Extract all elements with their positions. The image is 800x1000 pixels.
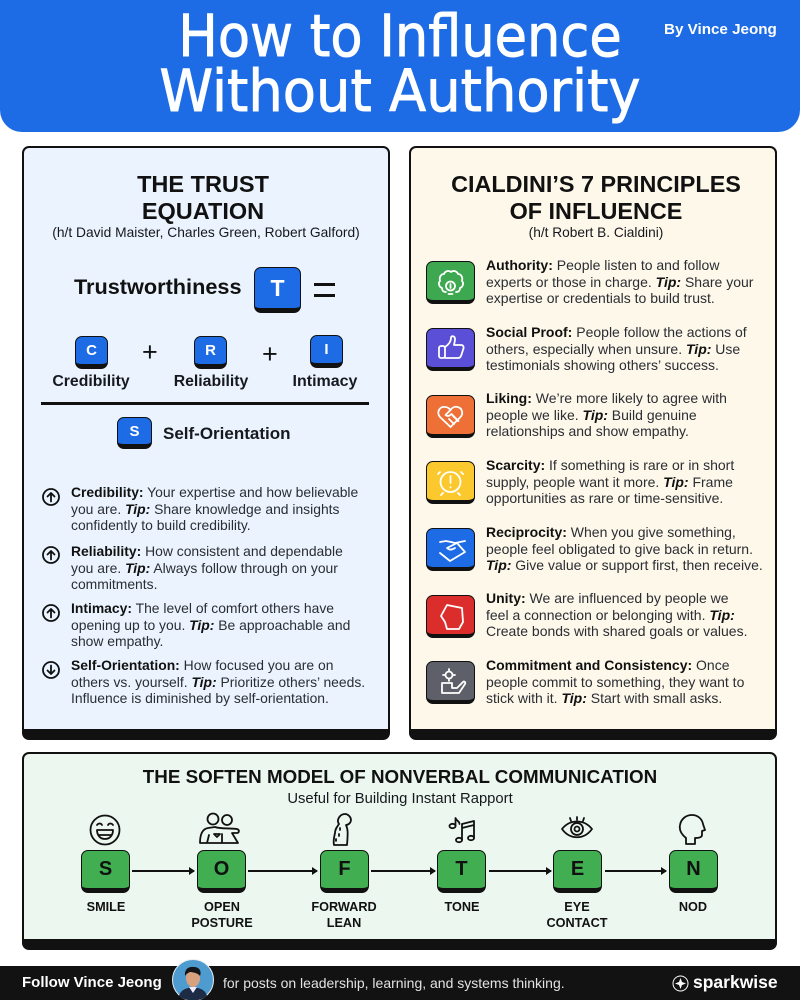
heading: cialdini: CIALDINI’S 7 PRINCIPLES — [451, 171, 741, 197]
heading: trust equation: THE TRUST — [137, 171, 269, 197]
key: N: N — [686, 858, 701, 880]
icon: music notes — [448, 817, 475, 844]
title — [159, 3, 641, 125]
icon: forward lean — [332, 813, 352, 846]
label: open posture: OPEN — [204, 900, 240, 914]
byline: By Vince Jeong — [664, 21, 777, 38]
text: reciprocity: Tip: Give value or support first, then receive. — [486, 557, 763, 573]
icon: thumbs up — [426, 328, 475, 371]
text: reliability — [71, 543, 343, 592]
text: liking: relationships and show empathy. — [486, 423, 689, 439]
title: How to Influence — [178, 3, 622, 70]
text: liking: people we like. Tip: Build genuine — [486, 407, 697, 423]
key: R: R — [205, 342, 216, 359]
text: intimacy: opening up to you. Tip: Be approachable and — [71, 617, 350, 633]
heading: cialdini: OF INFLUENCE — [510, 198, 682, 224]
icon: heart handshake — [426, 395, 475, 438]
text: authority: experts or those in charge. Tip: Share your — [486, 274, 753, 290]
connector arrow — [489, 870, 551, 872]
text: commitment: Commitment and Consistency: Once — [486, 657, 730, 673]
text: credibility: Credibility: Your expertise and how believable — [71, 484, 358, 500]
avatar — [172, 959, 214, 1000]
text: scarcity: supply, people want it more. Tip: Frame — [486, 474, 733, 490]
subheading: soften: Useful for Building Instant Rapport — [287, 791, 513, 807]
text: commitment: stick with it. Tip: Start with small asks. — [486, 690, 722, 706]
label: smile: SMILE — [87, 900, 125, 914]
label: forward lean: FORWARD — [311, 900, 377, 914]
text: authority — [486, 257, 754, 306]
text: unity: Create bonds with shared goals or values. — [486, 623, 747, 639]
fraction line — [41, 402, 369, 405]
text: reciprocity: Reciprocity: When you give something, — [486, 524, 736, 540]
text: self-orientation — [71, 657, 365, 706]
connector arrow — [132, 870, 194, 872]
key: O: O — [214, 858, 229, 880]
heading: soften: THE SOFTEN MODEL OF NONVERBAL COMMUNICATION — [143, 766, 657, 787]
label: reliability: Reliability — [174, 373, 248, 390]
text: authority: Authority: People listen to and follow — [486, 257, 719, 273]
text: scarcity: Scarcity: If something is rare or in short — [486, 457, 734, 473]
key: I: I — [324, 341, 329, 358]
label: eye contact — [546, 900, 608, 930]
text: reciprocity: people feel obligated to give back in return. — [486, 541, 753, 557]
key: S: S — [99, 858, 112, 880]
text: self-orientation: Influence is diminished by self-orientation. — [71, 690, 329, 706]
heading: cialdini — [451, 171, 741, 224]
icon: open posture — [199, 812, 240, 844]
text: unity: feel a connection or belonging with. Tip: — [486, 607, 735, 623]
title: Without Authority — [159, 58, 641, 125]
key: F — [320, 850, 369, 893]
icon: brain — [426, 261, 475, 304]
key: N — [669, 850, 718, 893]
key: C — [75, 336, 108, 369]
text: scarcity: opportunities as rare or time-sensitive. — [486, 490, 723, 506]
text: liking — [486, 390, 727, 439]
attribution: trust equation: (h/t David Maister, Charles Green, Robert Galford) — [52, 225, 360, 240]
text: self-orientation: others vs. yourself. Tip: Prioritize others’ needs. — [71, 674, 365, 690]
icon: down arrow — [42, 661, 60, 679]
text: commitment: people commit to something, they want to — [486, 674, 744, 690]
icon: handshake — [426, 528, 475, 571]
equals sign — [314, 283, 335, 297]
text: unity: Unity: We are influenced by people we — [486, 590, 729, 606]
key: F: F — [338, 858, 351, 880]
key: C: C — [86, 342, 97, 359]
footer: follow: Follow Vince Jeong — [22, 974, 162, 991]
key: S — [117, 417, 152, 449]
text: credibility: confidently to build credibility. — [71, 517, 251, 533]
text: scarcity — [486, 457, 734, 506]
icon: up arrow — [42, 488, 60, 506]
icon: smile — [90, 814, 120, 846]
plus sign: + — [142, 337, 158, 367]
text: credibility: you are. Tip: Share knowledge and insights — [71, 501, 339, 517]
key: I — [310, 335, 343, 368]
panel: soften model — [22, 752, 777, 950]
text: social proof: Social Proof: People follow the actions of — [486, 324, 747, 340]
label: eye contact: CONTACT — [546, 916, 608, 930]
icon: hand with gear — [426, 661, 475, 704]
text: self-orientation: Self-Orientation: How focused you are on — [71, 657, 333, 673]
icon: up arrow — [42, 604, 60, 622]
text: commitment — [486, 657, 744, 706]
text: credibility — [71, 484, 358, 533]
icon: fist — [426, 595, 475, 638]
label: forward lean: LEAN — [327, 916, 361, 930]
label: credibility: Credibility — [52, 373, 130, 390]
key: T: T — [270, 274, 285, 300]
key: T — [437, 850, 486, 893]
label: forward lean — [311, 900, 377, 930]
text: reliability: Reliability: How consistent and dependable — [71, 543, 343, 559]
heading: trust equation: EQUATION — [142, 198, 264, 224]
text: social proof — [486, 324, 747, 373]
key: S — [81, 850, 130, 893]
heading: trust equation — [137, 171, 269, 224]
logo: sparkwise: sparkwise — [693, 972, 778, 992]
text: unity — [486, 590, 747, 639]
key: E: E — [571, 858, 584, 880]
text: intimacy — [71, 600, 350, 649]
key: O — [197, 850, 246, 893]
text: intimacy: Intimacy: The level of comfort others have — [71, 600, 334, 616]
text: reliability: you are. Tip: Always follow through on your — [71, 560, 338, 576]
header banner — [0, 0, 800, 132]
key: R — [194, 336, 227, 369]
panel: cialdini principles — [409, 146, 777, 740]
label: open posture: POSTURE — [191, 916, 253, 930]
attribution: cialdini: (h/t Robert B. Cialdini) — [529, 225, 663, 240]
connector arrow — [605, 870, 666, 872]
icon: alarm clock — [426, 461, 475, 504]
icon: up arrow — [42, 546, 60, 564]
key: T — [254, 267, 301, 313]
text: authority: expertise or credentials to build trust. — [486, 290, 715, 306]
footer bar — [0, 966, 800, 1000]
icon: eye — [561, 816, 593, 838]
key: S: S — [129, 422, 140, 440]
text: liking: Liking: We’re more likely to agree with — [486, 390, 727, 406]
connector arrow — [248, 870, 317, 872]
label: intimacy: Intimacy — [293, 373, 357, 390]
label: tone: TONE — [444, 900, 480, 914]
text: reciprocity — [486, 524, 763, 573]
label: eye contact: EYE — [564, 900, 590, 914]
label: self-orientation: Self-Orientation — [163, 424, 291, 443]
label: nod: NOD — [679, 900, 707, 914]
equation: trustworthiness: Trustworthiness — [74, 274, 242, 299]
key: T: T — [455, 858, 468, 880]
connector arrow — [371, 870, 435, 872]
text: reliability: commitments. — [71, 576, 157, 592]
label: open posture — [191, 900, 253, 930]
text: social proof: others, especially when unsure. Tip: Use — [486, 341, 740, 357]
footer: tagline: for posts on leadership, learning, and systems thinking. — [223, 975, 565, 991]
icon: head — [678, 814, 706, 845]
plus sign: + — [262, 339, 278, 369]
text: intimacy: show empathy. — [71, 633, 163, 649]
text: social proof: testimonials showing others’ success. — [486, 357, 719, 373]
key: E — [553, 850, 602, 893]
panel: trust equation — [22, 146, 390, 740]
